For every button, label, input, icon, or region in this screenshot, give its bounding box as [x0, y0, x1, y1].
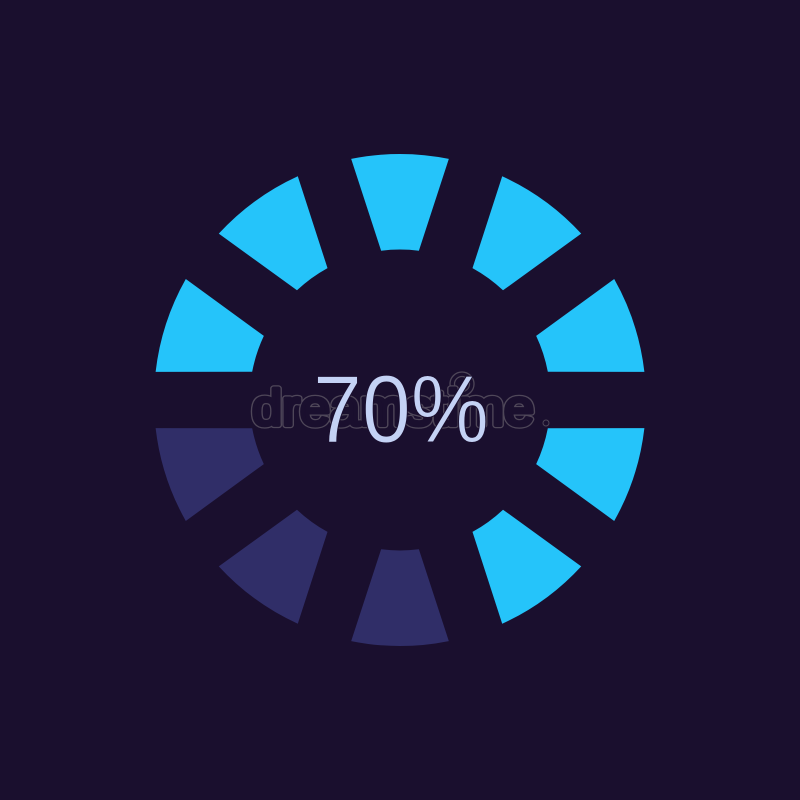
percentage label: 70% [313, 356, 489, 463]
filled segments: 70 percent [151, 154, 649, 628]
watermark: dreamstime [252, 380, 534, 436]
watermark: dreamstime [252, 380, 534, 436]
empty segments: remaining 30 percent [151, 400, 449, 646]
